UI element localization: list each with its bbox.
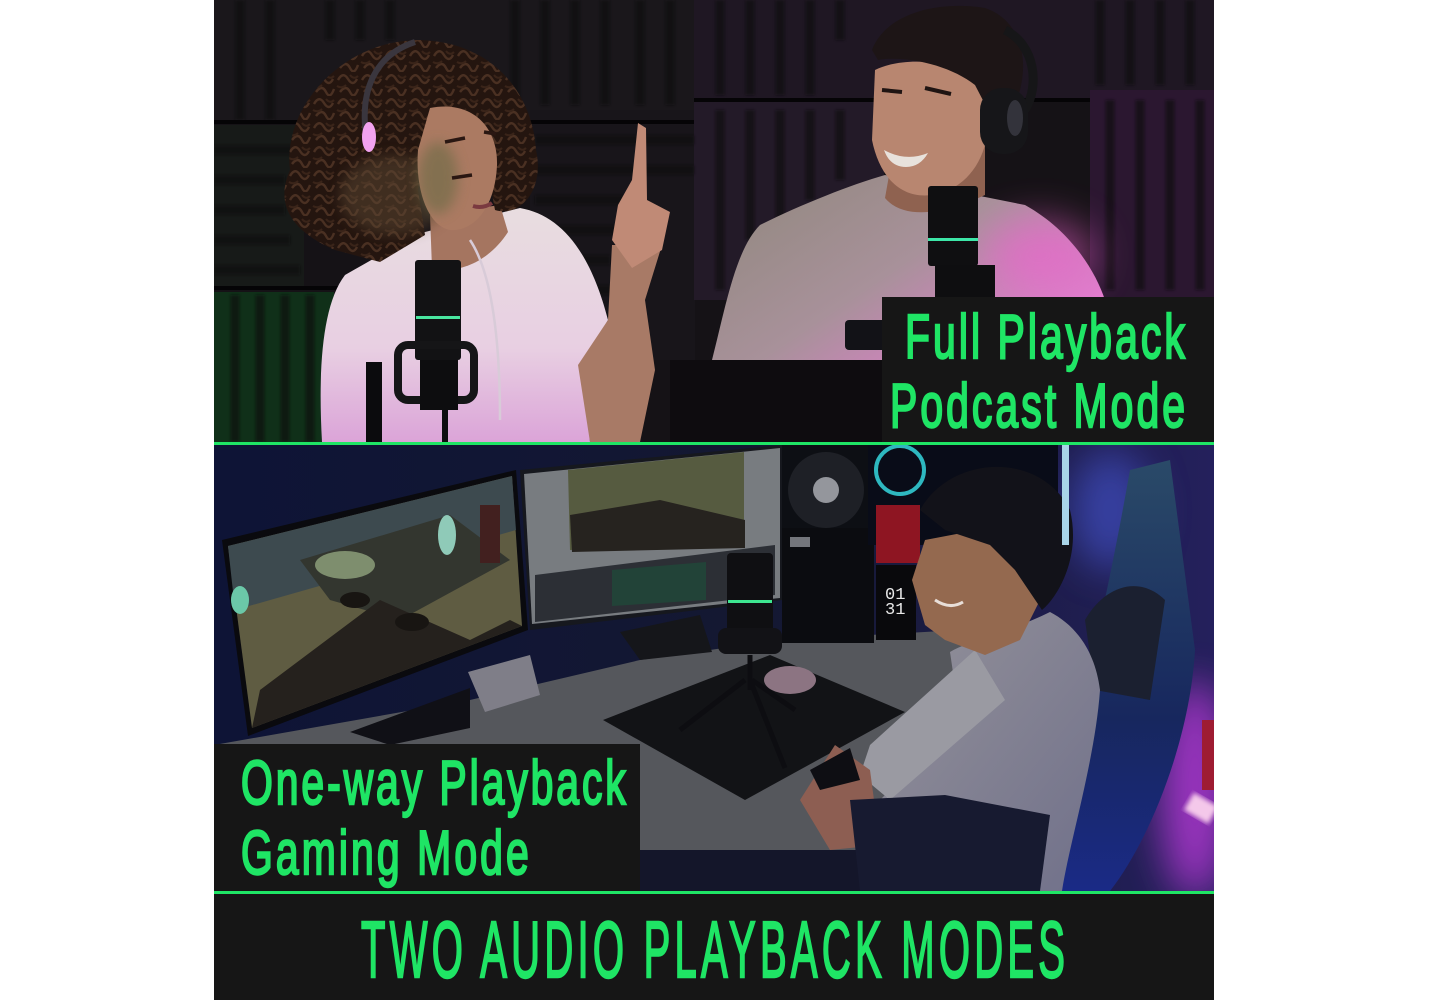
man bbox=[712, 6, 1105, 360]
man gaming bbox=[800, 467, 1100, 891]
label text: Podcast Mode: Podcast Mode bbox=[890, 372, 1185, 441]
divider line bottom bbox=[214, 891, 1214, 894]
gaming chair bbox=[1062, 460, 1195, 891]
title banner bbox=[214, 894, 1214, 1000]
microphone on tripod bbox=[718, 553, 782, 664]
title: TWO AUDIO PLAYBACK MODES bbox=[361, 906, 1065, 995]
studio monitor speaker bbox=[782, 445, 874, 643]
mouse bbox=[764, 666, 816, 694]
photo: gaming mode bbox=[214, 445, 1230, 900]
desk shadow bbox=[670, 360, 900, 442]
chest prop bbox=[468, 655, 540, 712]
divider line top bbox=[214, 442, 1214, 445]
label text: One-way Playback: One-way Playback bbox=[241, 749, 626, 818]
curly hair bbox=[284, 40, 538, 262]
label text: Gaming Mode: Gaming Mode bbox=[241, 819, 529, 888]
pc tower bbox=[868, 445, 1058, 640]
pink and blue glow bbox=[1160, 680, 1230, 900]
label text: Full Playback: Full Playback bbox=[905, 303, 1185, 372]
acoustic foam wall bbox=[214, 0, 1214, 442]
woman bbox=[284, 40, 670, 442]
left monitor bbox=[222, 470, 528, 745]
microphone bbox=[415, 260, 461, 360]
label: full playback podcast mode bbox=[882, 297, 1214, 442]
pc tower: 31 bbox=[885, 601, 905, 620]
label: one-way playback gaming mode bbox=[214, 744, 640, 891]
pc tower: 01 bbox=[885, 586, 905, 605]
infographic canvas bbox=[214, 0, 1214, 1000]
headphone band bbox=[365, 42, 415, 135]
desk bbox=[220, 632, 962, 850]
right monitor bbox=[520, 445, 782, 660]
photo: podcast mode bbox=[214, 0, 1214, 442]
right side lights bbox=[1184, 793, 1218, 824]
